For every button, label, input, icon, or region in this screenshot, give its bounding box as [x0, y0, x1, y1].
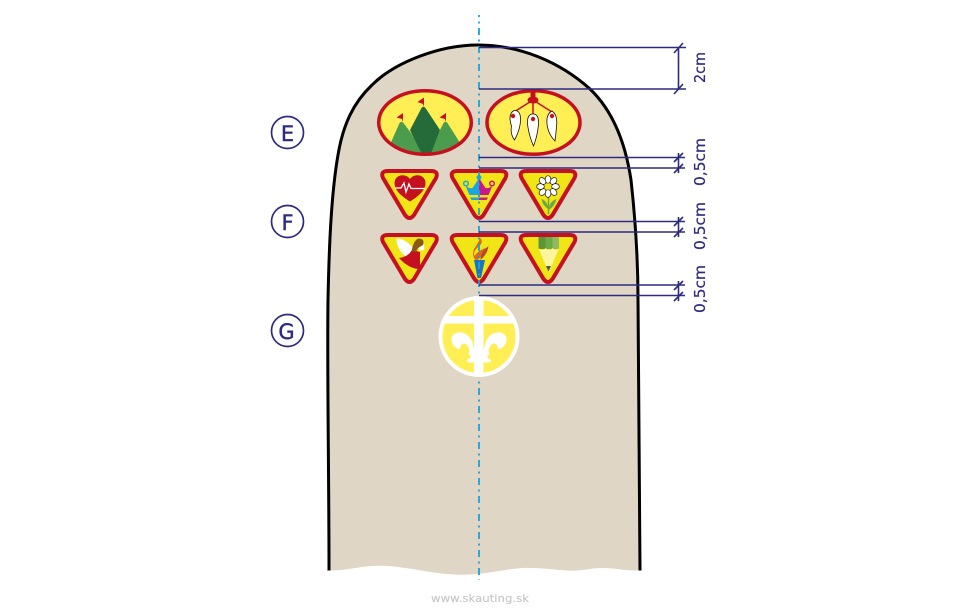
badge: torch	[452, 235, 506, 282]
marker G	[272, 314, 304, 346]
badge: heart	[382, 171, 437, 218]
label: 2cm: 2cm	[691, 52, 709, 83]
dimension: 0,5cm lower	[479, 281, 685, 301]
marker F: F	[281, 211, 294, 235]
dimension: 2cm	[479, 43, 686, 94]
label: 0,5cm: 0,5cm	[691, 138, 709, 186]
marker E	[272, 116, 304, 148]
label: 0,5cm: 0,5cm	[691, 265, 709, 313]
label: 0,5cm: 0,5cm	[691, 202, 709, 250]
dimension: 0,5cm middle	[479, 217, 685, 237]
emblem E: three claws oval	[487, 91, 580, 154]
dimension: 0,5cm upper	[479, 153, 685, 173]
badge: crown	[452, 171, 506, 218]
marker G: G	[278, 320, 295, 344]
marker F	[272, 206, 304, 238]
sleeve	[328, 45, 640, 575]
emblem G: white circle with lily	[438, 296, 520, 378]
badge: pencil	[521, 235, 575, 282]
badge: daisy	[521, 171, 575, 218]
emblem E: mountains oval	[379, 91, 471, 156]
badge: angel	[382, 235, 437, 282]
marker E: E	[281, 122, 294, 146]
axis: blue dash-dot center line	[478, 15, 480, 580]
website footer: www.skauting.sk	[431, 592, 530, 605]
